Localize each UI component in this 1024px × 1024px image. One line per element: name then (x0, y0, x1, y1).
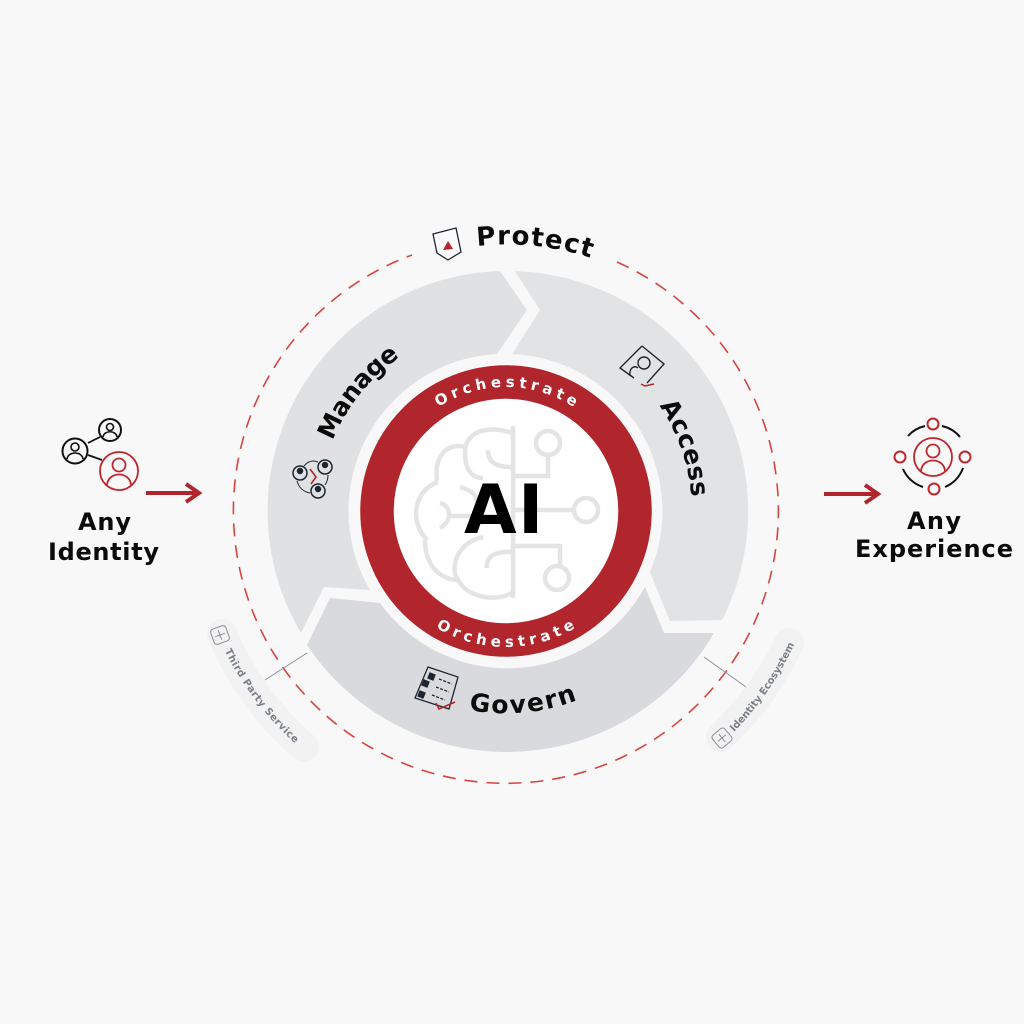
label: orchestrate top: Orchestrate (435, 377, 576, 406)
label: any experience (855, 507, 1013, 563)
segment: govern (307, 587, 714, 752)
connector: third party (265, 653, 307, 680)
icon: govern checklist (415, 667, 458, 709)
label: third party service: Third Party Service (226, 647, 298, 743)
icon: identity network (62, 419, 138, 490)
label: identity ecosystem: Identity Ecosystem (730, 643, 794, 732)
icon: protect shield (433, 228, 461, 260)
icon: third party plus (210, 625, 230, 645)
connector: identity ecosystem (704, 657, 746, 687)
label: any experience: Experience (855, 535, 1013, 563)
segment: access (512, 271, 748, 621)
center label: AI: AI (464, 471, 543, 550)
label: access: Access (660, 402, 705, 496)
label: any experience: Any (907, 507, 961, 535)
label: manage: Manage (316, 349, 398, 439)
dashed protect ring (233, 255, 778, 783)
label: any identity: Identity (48, 538, 159, 566)
label: any identity (48, 508, 159, 566)
orchestrate ring (360, 365, 652, 657)
label: any identity: Any (78, 508, 131, 536)
panel: any identity (48, 419, 199, 566)
arrow: into diagram (146, 484, 199, 502)
icon: experience orbit (894, 418, 970, 494)
label: protect: Protect (478, 226, 594, 258)
panel: identity ecosystem tab (712, 643, 794, 748)
icon: manage network (293, 460, 332, 498)
icon: AI brain circuit (416, 426, 598, 598)
label: orchestrate bottom: Orchestrate (438, 620, 574, 648)
panel: any experience (824, 418, 1013, 563)
arrow: out of diagram (824, 485, 878, 503)
icon: identity ecosystem plus (711, 727, 733, 749)
segment: manage (268, 271, 527, 633)
label: govern: Govern (471, 688, 576, 714)
panel: third party service tab (210, 625, 298, 743)
icon: access identity card (620, 346, 664, 386)
